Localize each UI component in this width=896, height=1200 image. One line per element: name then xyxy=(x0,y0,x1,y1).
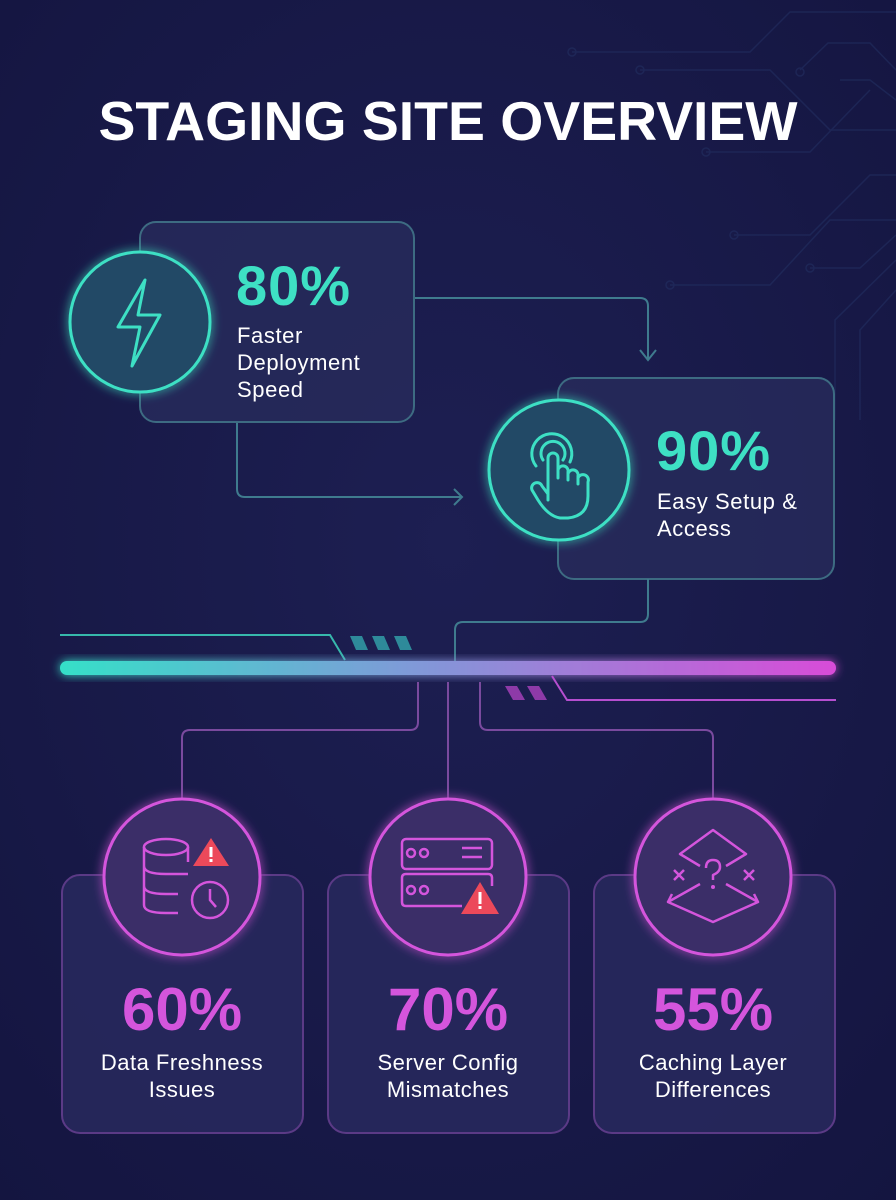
connectors to bottom cards xyxy=(182,682,713,800)
stat 55%: 55% xyxy=(653,976,773,1043)
stat 90%: 90% xyxy=(656,419,771,482)
connector: card2 to bar xyxy=(455,579,648,668)
gradient bar xyxy=(60,661,836,675)
icon: layers question xyxy=(635,799,791,955)
label: Issues xyxy=(149,1077,215,1102)
icon: lightning xyxy=(70,252,210,392)
title: STAGING SITE OVERVIEW xyxy=(98,90,798,152)
card: 80% xyxy=(70,222,414,422)
label: Server Config xyxy=(377,1050,519,1075)
stat 80%: 80% xyxy=(236,254,351,317)
card: 90% xyxy=(489,378,834,579)
label: Deployment xyxy=(237,350,360,375)
arrow: card1 to card2 (bottom) xyxy=(237,422,462,505)
label: Caching Layer xyxy=(639,1050,787,1075)
card: 55% xyxy=(594,799,835,1133)
icon: tap hand xyxy=(489,400,629,540)
label: Speed xyxy=(237,377,304,402)
card: 70% xyxy=(328,799,569,1133)
decorative teal rail xyxy=(60,635,412,660)
label: Easy Setup & xyxy=(657,489,798,514)
stat 60%: 60% xyxy=(122,976,242,1043)
decorative magenta rail xyxy=(505,676,836,700)
arrow: card1 to card2 (top) xyxy=(414,298,656,360)
stat 70%: 70% xyxy=(388,976,508,1043)
label: Access xyxy=(657,516,732,541)
label: Differences xyxy=(655,1077,771,1102)
card: 60% xyxy=(62,799,303,1133)
icon: server warning xyxy=(370,799,526,955)
icon: database warning xyxy=(104,799,260,955)
label: Data Freshness xyxy=(101,1050,263,1075)
label: Mismatches xyxy=(387,1077,509,1102)
label: Faster xyxy=(237,323,303,348)
